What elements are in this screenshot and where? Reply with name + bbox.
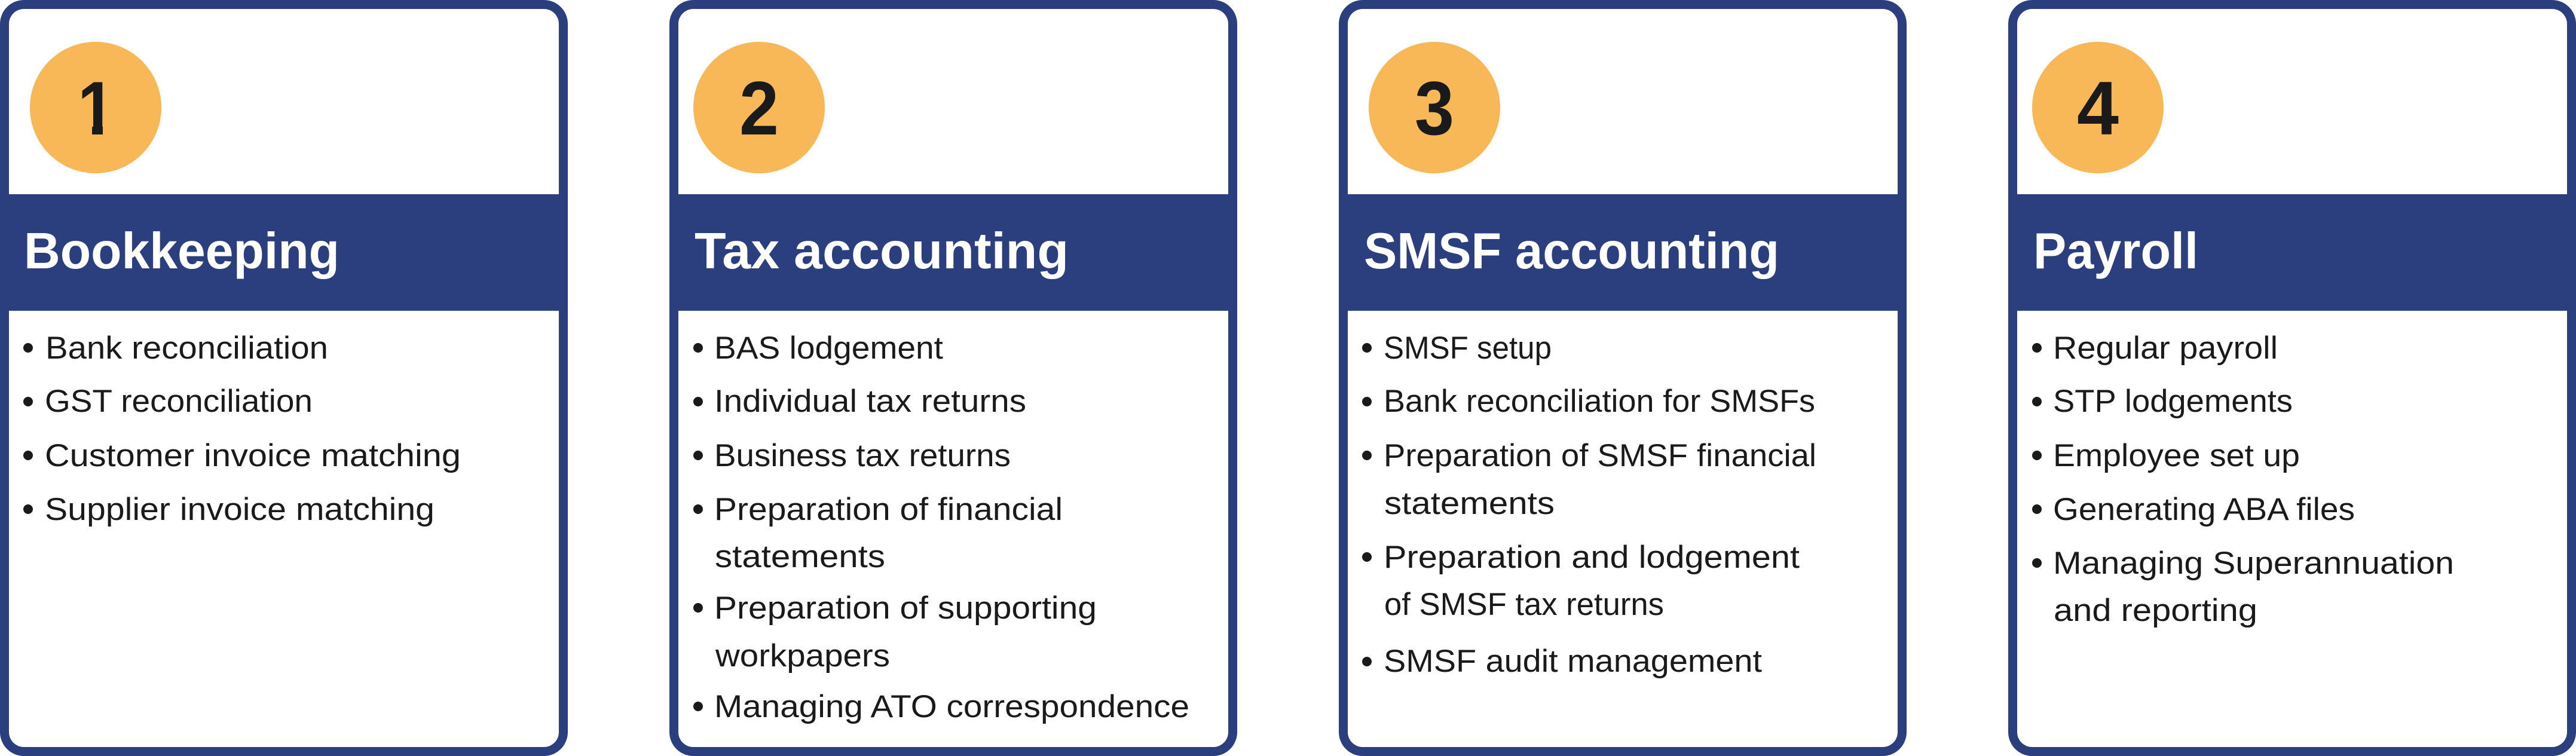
- number badge 3: [1369, 42, 1500, 173]
- card frame: [669, 0, 1237, 756]
- item: Business tax returns: [714, 438, 1011, 473]
- item: SMSF audit management: [1384, 644, 1762, 679]
- item: and reporting: [2054, 593, 2257, 628]
- number badge 3: 3: [1415, 66, 1454, 151]
- item: statements: [1384, 486, 1555, 521]
- item: Employee set up: [2053, 438, 2300, 473]
- item: [1362, 438, 1816, 521]
- item: SMSF setup: [1384, 330, 1552, 366]
- panel: Bookkeeping: [0, 0, 568, 756]
- item: statements: [715, 539, 885, 574]
- item: Preparation of supporting: [714, 590, 1097, 626]
- heading: Tax accounting: Tax accounting: [695, 223, 1069, 280]
- item: Customer invoice matching: [45, 438, 461, 473]
- item: workpapers: [715, 638, 890, 674]
- item: Supplier invoice matching: [45, 492, 435, 527]
- item: Generating ABA files: [2053, 492, 2355, 527]
- card frame: [0, 0, 568, 756]
- item: [693, 492, 1063, 574]
- item: GST reconciliation: [45, 384, 313, 419]
- item: Preparation of financial: [714, 492, 1063, 527]
- item: Preparation of SMSF financial: [1384, 438, 1816, 473]
- item: of SMSF tax returns: [1384, 587, 1664, 622]
- list: SMSF services: [1362, 330, 1816, 679]
- item: [2032, 546, 2454, 628]
- item: Regular payroll: [2053, 330, 2278, 366]
- item: Preparation and lodgement: [1384, 540, 1800, 575]
- item: Bank reconciliation for SMSFs: [1384, 384, 1815, 419]
- number badge 4: [2032, 42, 2164, 173]
- item: Managing Superannuation: [2053, 546, 2454, 581]
- heading band: [2008, 194, 2576, 311]
- number badge 4: 4: [2077, 66, 2119, 151]
- list: payroll services: [2032, 330, 2454, 628]
- panel: Tax accounting: [669, 0, 1237, 756]
- item: Individual tax returns: [714, 384, 1026, 419]
- list: tax services: [693, 330, 1189, 724]
- item: BAS lodgement: [714, 330, 943, 366]
- item: Bank reconciliation: [45, 330, 328, 366]
- number badge 2: [693, 42, 825, 173]
- number badge 1: [30, 42, 161, 173]
- heading band: [669, 194, 1237, 311]
- item: STP lodgements: [2053, 384, 2293, 419]
- item: [1362, 540, 1800, 622]
- panel: Payroll: [2008, 0, 2576, 756]
- heading: Bookkeeping: Bookkeeping: [24, 223, 339, 280]
- heading: Payroll: Payroll: [2033, 223, 2198, 280]
- card frame: [1339, 0, 1907, 756]
- heading: SMSF accounting: SMSF accounting: [1364, 223, 1779, 280]
- heading band: [1339, 194, 1907, 311]
- number badge 1: 1: [78, 66, 115, 151]
- heading band: [0, 194, 568, 311]
- number badge 2: 2: [739, 66, 779, 151]
- card frame: [2008, 0, 2576, 756]
- list: bookkeeping services: [23, 330, 461, 527]
- panel: SMSF accounting: [1339, 0, 1907, 756]
- item: [693, 590, 1097, 674]
- item: Managing ATO correspondence: [714, 689, 1189, 724]
